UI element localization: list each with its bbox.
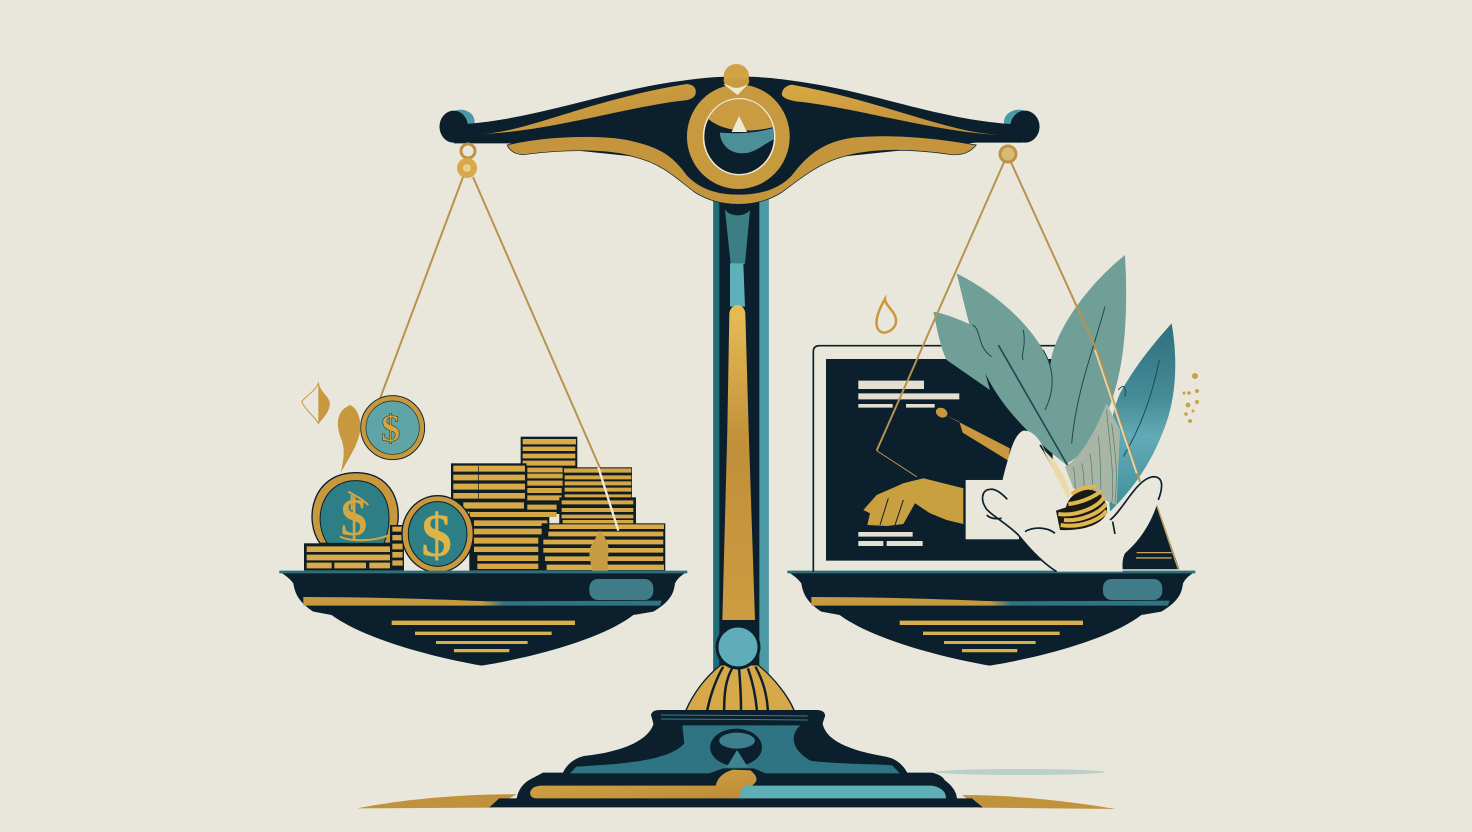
middle coin: $ (421, 502, 452, 570)
coin stack top (521, 437, 577, 470)
pan stripe (811, 597, 1170, 606)
scale beam (439, 64, 1040, 204)
floor shadow (935, 769, 1105, 775)
outlined diamond drop (302, 383, 329, 423)
small gold drop on stacks (589, 531, 609, 571)
right pan contents (813, 255, 1179, 572)
laptop frame (813, 346, 1057, 572)
beam end right (1004, 110, 1040, 143)
pan lines (392, 621, 575, 652)
pan rim (787, 568, 1195, 576)
medallion ring (687, 84, 790, 189)
left pan contents (302, 383, 665, 572)
coin stack middle column (523, 467, 567, 514)
leaf fibers (1065, 403, 1120, 505)
keyhole emblem (710, 729, 762, 767)
large coin (312, 473, 398, 547)
right scale strings (877, 160, 1140, 482)
string highlight (598, 467, 618, 531)
pan stripe (303, 597, 662, 606)
back leaf (933, 312, 990, 390)
left scale pan (279, 572, 687, 666)
lower gold sweep (507, 136, 976, 204)
base teal band (738, 786, 946, 798)
scale base (357, 665, 1116, 809)
coin stack lower right (542, 523, 665, 571)
left scale strings (372, 177, 600, 468)
screen text bars bottom (858, 532, 923, 546)
floating coin: $ (381, 408, 400, 450)
coin stack far left (304, 543, 392, 571)
coin stack lower center (469, 511, 557, 571)
coin stack left tall (451, 463, 527, 512)
dark teal leaf (1108, 323, 1175, 512)
gold reaching hand (863, 478, 963, 526)
pan lines (900, 621, 1083, 652)
fluted collar (686, 665, 794, 711)
central post (713, 197, 769, 677)
leaf veins (973, 307, 1159, 467)
floor gold left (357, 794, 517, 808)
middle coin (402, 496, 473, 572)
pan rim (279, 568, 687, 576)
gold teardrop (338, 405, 360, 473)
right scale pan (787, 572, 1195, 666)
pan pill (1103, 579, 1162, 600)
pedestal moulding (661, 715, 808, 720)
gold pen (934, 406, 1010, 461)
pedestal teal panel (570, 725, 900, 773)
upper gold arm left (481, 84, 696, 134)
triangle edge and bars (1136, 500, 1178, 569)
base gold band (530, 770, 757, 798)
pan pill (589, 579, 653, 600)
medallion window (702, 98, 776, 176)
floating coin (361, 396, 425, 460)
right hanger ring (1000, 146, 1016, 162)
beam body (454, 77, 1023, 201)
floor gold right (962, 795, 1116, 809)
pedestal body (489, 710, 983, 807)
post knob (717, 626, 759, 668)
large front leaf (957, 273, 1080, 465)
white card (966, 480, 1019, 539)
hand outline (983, 445, 1162, 572)
outlined flame icon (876, 299, 896, 333)
upper gold arm right (782, 85, 999, 135)
dark base triangle (1120, 498, 1179, 569)
coin stack right middle (559, 497, 636, 526)
tall leaf (1049, 255, 1126, 463)
white open hand (983, 431, 1162, 572)
top finial (723, 64, 749, 95)
narrow coin stack (390, 525, 404, 571)
large coin: $ (341, 487, 367, 547)
cream sliver (1043, 450, 1071, 497)
gold speckles (1182, 373, 1199, 423)
beam end left (439, 110, 475, 143)
coin stack right upper (563, 467, 632, 501)
striped shell (1056, 487, 1107, 530)
laptop screen (826, 359, 1053, 561)
screen text bars top (858, 381, 959, 408)
left hanger rings (457, 144, 477, 178)
